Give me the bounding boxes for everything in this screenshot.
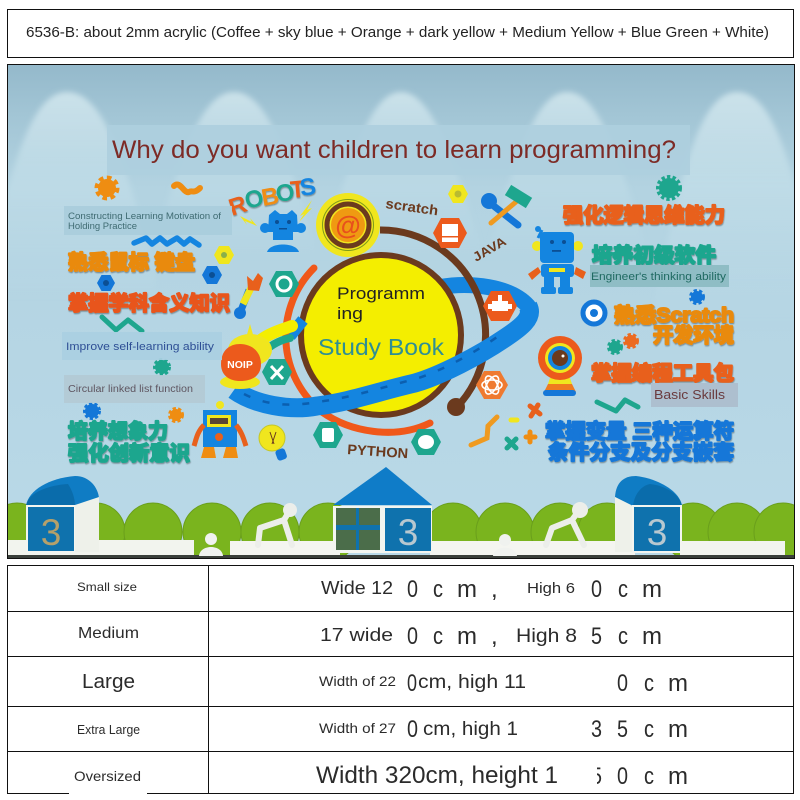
icon: NOIP rocket [220, 324, 272, 389]
icon: teal hex with tools [262, 359, 292, 385]
row: large: m [668, 670, 688, 697]
centre labels: Programm [337, 284, 425, 303]
row: large: Width of 22 [319, 673, 396, 689]
cabinet: left blue arch with number 3: 3 [41, 512, 61, 553]
row: small size: m [457, 576, 477, 603]
row: oversized: m [668, 763, 688, 790]
cabinet: centre blue house with number 3: 3 [398, 512, 418, 553]
wall background with spotlights [0, 65, 800, 558]
PYTHON label: PYTHON [347, 441, 409, 461]
row: oversized [74, 762, 688, 790]
row: large: Large [82, 671, 135, 693]
ROBOTS letters [228, 178, 316, 217]
icon: teal zigzag left [102, 317, 142, 331]
cabinet: left blue arch with number 3 [26, 476, 99, 553]
row: small size: 0 [591, 576, 602, 603]
icon: teal hex with gear [269, 271, 299, 297]
row: extra large: c [644, 716, 654, 743]
row: oversized: Width 320cm, height 1 [316, 762, 558, 789]
row: small size: Small size [77, 580, 137, 594]
cabinet: right blue arch with number 3: 3 [647, 512, 667, 553]
row: oversized: 0 [617, 763, 628, 790]
icon: orange chain squiggle [174, 184, 200, 192]
icon: wrench and hammer [481, 190, 529, 225]
Chinese skill text, left column: 熟悉鼠标 键盘 [68, 250, 195, 274]
road ring, back part [440, 285, 528, 306]
row: large: cm, high 11 [418, 672, 526, 693]
icon: teal gear top right [659, 178, 679, 198]
row: medium: c [618, 623, 628, 650]
icon: blue zigzag wave [134, 238, 199, 245]
scratch label: scratch [385, 195, 439, 218]
table: size options [7, 565, 794, 794]
top spec caption box: 6536-B: about 2mm acrylic (Coffee + sky blue + Orange + dark yellow + Medium Yellow + Blue Green + White) [26, 25, 769, 41]
robot toys on shelves [199, 505, 585, 556]
Chinese skill text, left column: 培养想象力 [68, 419, 168, 443]
icon: teal hex with robot face [313, 422, 343, 448]
row: medium: Medium [78, 625, 139, 642]
callout: Engineer's thinking ability: Engineer's thinking ability [591, 271, 727, 283]
top spec caption box [8, 10, 794, 58]
icon: wrench column [234, 273, 263, 319]
centre labels [318, 284, 445, 360]
callout: Basic Skills [651, 383, 738, 407]
toy: astronaut figure left [199, 533, 223, 556]
row: small size: High 6 [527, 580, 575, 597]
Chinese skill text, right column: 掌握变量 三种运算符 [545, 419, 734, 443]
row: medium: High 8 [516, 626, 577, 647]
icon: blue robot with orange limbs [194, 401, 246, 458]
toy: robot dog right [546, 505, 585, 545]
row: extra large: 0 [407, 716, 418, 743]
icon: gear orange top left [98, 179, 116, 197]
row: extra large: 5 [617, 716, 628, 743]
rainbow tail of rocket [250, 326, 292, 358]
ROBOTS letters: B [259, 182, 281, 212]
row: large: 0 [617, 670, 628, 697]
icon: lightbulb [259, 425, 288, 461]
row: small size: , [491, 576, 498, 603]
row: medium: m [642, 623, 662, 650]
row: medium [78, 623, 662, 650]
row: medium: 5 [591, 623, 602, 650]
row: medium: c [433, 623, 443, 650]
road ring, front part with dashes [234, 306, 529, 408]
ROBOTS letters: S [298, 173, 318, 202]
row: extra large [77, 716, 688, 743]
icon: gears and target right [583, 291, 703, 353]
orange arc [286, 268, 430, 432]
panel: product photo of wall decoration [0, 65, 800, 561]
icon: @ target: @ [335, 210, 361, 240]
row: small size: m [642, 576, 662, 603]
row: extra large: m [668, 716, 688, 743]
title banner: Why do you want children to learn programming? [112, 136, 676, 164]
icon: small gears left [85, 360, 182, 421]
ROBOTS letters: R [226, 191, 250, 222]
callout: Improve self-learning ability [62, 332, 222, 360]
callout: Constructing Learning Motivation [64, 206, 232, 235]
row: small size: Wide 12 [321, 578, 393, 598]
callout: Circular linked list function [64, 375, 205, 403]
row: medium: , [491, 623, 498, 650]
Chinese skill text, right column: 强化逻辑思维能力 [563, 204, 725, 227]
row: medium: m [457, 623, 477, 650]
ROBOTS letters: T [289, 176, 306, 204]
ROBOTS letters: O [242, 184, 267, 215]
ROBOTS letters: O [274, 179, 296, 208]
Chinese skill text, right column: 开发环境 [653, 323, 734, 347]
row: extra large: Width of 27 [319, 720, 396, 736]
JAVA label: JAVA [470, 233, 509, 265]
Chinese skill text, right column [545, 204, 734, 464]
toy: astronaut figure right [493, 534, 517, 556]
row: large [82, 670, 688, 697]
Chinese skill text, right column: 掌握编程工具包 [591, 361, 734, 385]
row: oversized: c [644, 763, 654, 790]
Chinese skill text, right column: 培养初级软件 [592, 243, 716, 267]
Chinese skill text, right column: 条件分支及分支嵌套 [548, 441, 734, 464]
cabinet: right blue arch with number 3 [615, 476, 682, 553]
icon: yellow lightning bolts [240, 200, 312, 226]
callout: Constructing Learning Motivation: Constructing Learning Motivation of [68, 211, 221, 222]
row: extra large: 3 [591, 716, 602, 743]
toy: robot dog left [258, 506, 294, 545]
icon: blue robot head [260, 210, 306, 252]
coffee outer arc with ball end [380, 230, 486, 416]
icon: yellow nut [448, 185, 468, 203]
icon: blue robot, right [528, 226, 586, 294]
cabinet: centre blue house with number 3 [333, 467, 432, 553]
centre labels: ing [337, 304, 363, 323]
Chinese skill text, left column: 强化创新意识 [68, 441, 190, 465]
icon: small shapes near webcam [471, 400, 638, 448]
icon: orange hex with window [433, 218, 467, 248]
row: small size [77, 576, 662, 603]
row: medium: 17 wide [320, 625, 393, 645]
row: extra large: cm, high 1 [423, 719, 518, 740]
product photo frame [8, 64, 794, 558]
row: small size: c [433, 576, 443, 603]
orange hex with robot glyph on road [483, 291, 517, 321]
white patch over table bottom border [69, 791, 147, 800]
shelves: white bench row [8, 540, 794, 558]
road ring, left stub behind circle [290, 320, 303, 336]
callout: Engineer's thinking ability [590, 265, 729, 287]
Chinese skill text, right column: 熟悉Scratch [614, 303, 734, 327]
icon: webcam [538, 336, 582, 396]
icon: @ target [316, 193, 380, 257]
planet: yellow circle with brown rim [301, 255, 461, 415]
row: large: 0 [407, 670, 417, 697]
Chinese skill text, left column [68, 250, 230, 465]
icon: orange hex with atom [476, 371, 508, 399]
callout: Basic Skills: Basic Skills [654, 387, 726, 402]
callout: Constructing Learning Motivation: Holding Practice [68, 221, 137, 232]
row: small size: 0 [407, 576, 418, 603]
row: oversized: Oversized [74, 768, 141, 784]
row: large: c [644, 670, 654, 697]
hedge: green semicircle row [8, 502, 794, 555]
row: extra large: Extra Large [77, 722, 140, 737]
callout: Improve self-learning ability: Improve self-learning ability [66, 341, 215, 353]
icon: NOIP rocket: NOIP [227, 359, 253, 371]
callout: Circular linked list function: Circular linked list function [68, 384, 193, 395]
icon: hex nuts [97, 246, 234, 291]
title banner [107, 125, 690, 175]
Chinese skill text, left column: 掌握学科含义知识 [68, 291, 230, 315]
row: small size: c [618, 576, 628, 603]
icon: teal hex with brain [411, 429, 441, 455]
row: medium: 0 [407, 623, 418, 650]
centre labels: Study Book [318, 334, 445, 360]
